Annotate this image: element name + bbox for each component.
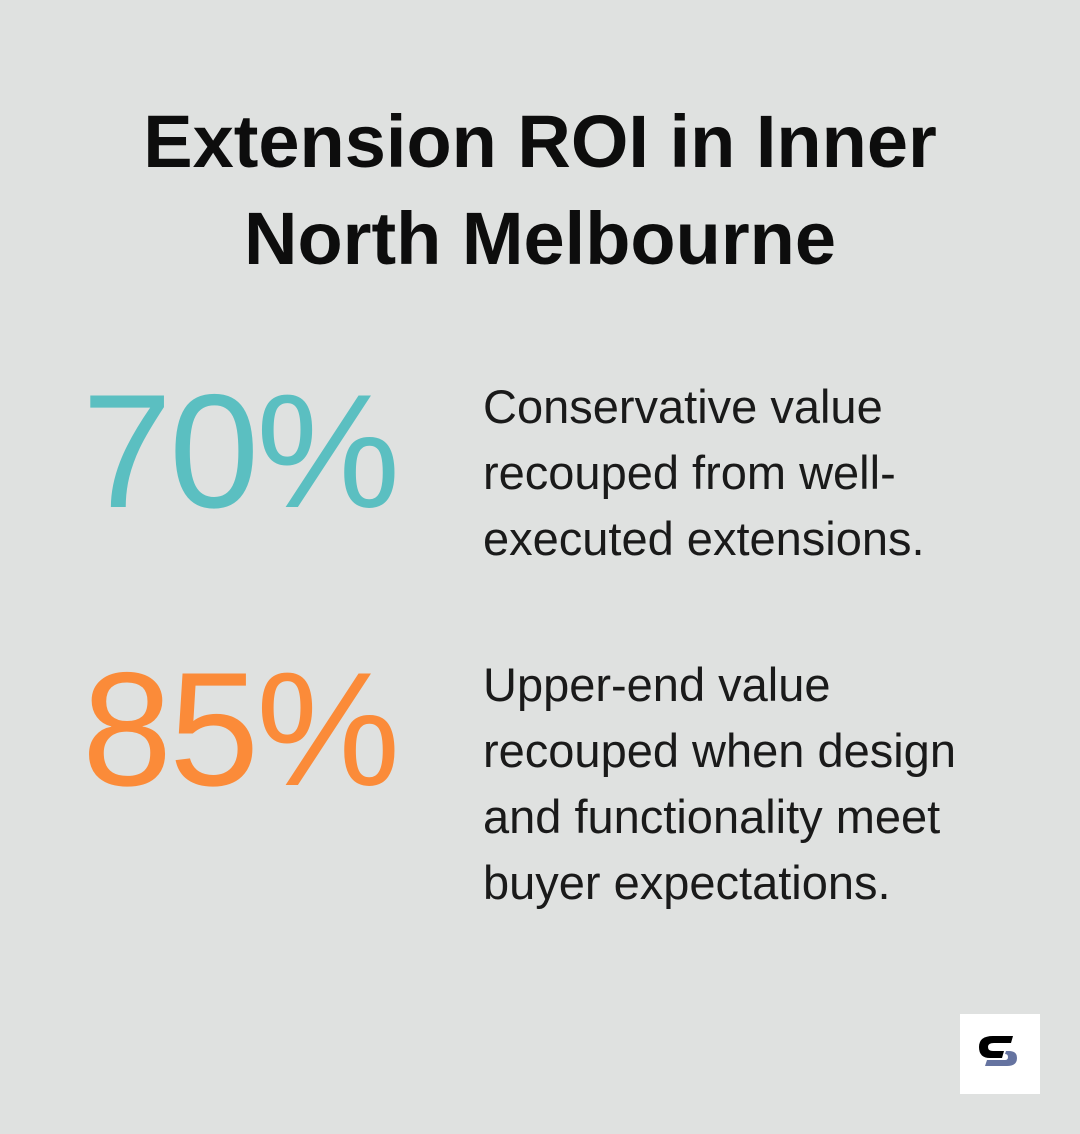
text: conservative value: executed extensions. [483,512,925,565]
text: conservative value: recouped from well- [483,446,896,499]
stat: 85%: 85% [82,639,397,820]
text: upper-end value: and functionality meet [483,790,940,843]
title: Extension ROI in Inner [143,100,937,183]
logo [960,1014,1040,1094]
title: North Melbourne [244,197,836,280]
text: conservative value [483,380,925,565]
text: upper-end value: buyer expectations. [483,856,891,909]
title [143,100,937,280]
text: upper-end value: Upper-end value [483,658,830,711]
text: upper-end value: recouped when design [483,724,956,777]
text: upper-end value [483,658,956,909]
text: conservative value: Conservative value [483,380,883,433]
stat: 70%: 70% [82,361,397,542]
